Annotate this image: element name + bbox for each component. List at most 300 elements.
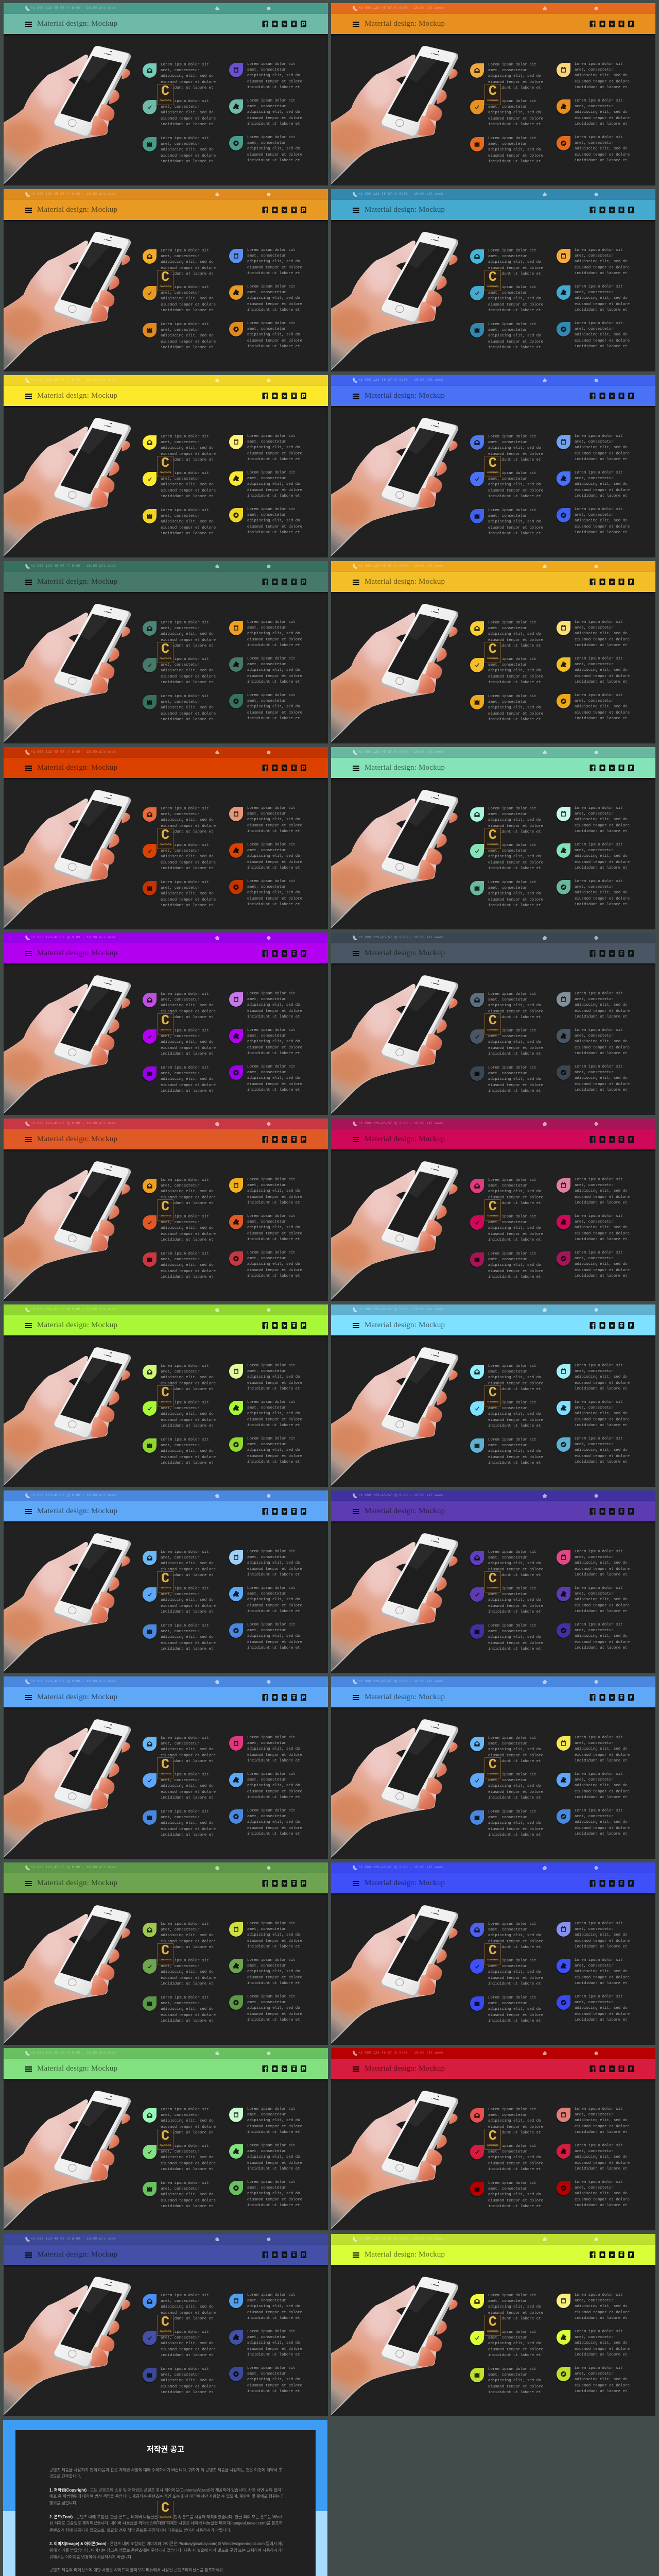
- watermark: [157, 828, 174, 849]
- feature: Lorem ipsum dolor sit amet, consectetur adipiscing elit, sed do eiusmod tempor et dolore incididunt ut labore et: [161, 2108, 216, 2135]
- feature: [229, 1623, 306, 1654]
- copyright: 행위를 금합니다.: [49, 2501, 78, 2505]
- watermark: [484, 1013, 501, 1035]
- watermark: CONTENTS: [160, 1028, 171, 1031]
- contact bar: [4, 1490, 328, 1501]
- feature: [229, 1065, 306, 1096]
- hand holding phone: [331, 1304, 655, 1487]
- watermark: [484, 2315, 501, 2336]
- feature: Lorem ipsum dolor sit amet, consectetur adipiscing elit, sed do eiusmod tempor et dolore incididunt ut labore et: [575, 806, 630, 834]
- watermark: CONTENTS: [160, 1214, 171, 1217]
- feature: Lorem ipsum dolor sit amet, consectetur adipiscing elit, sed do eiusmod tempor et dolore incididunt ut labore et: [247, 2144, 302, 2171]
- title bar: [331, 1873, 655, 1893]
- feature: Lorem ipsum dolor sit amet, consectetur adipiscing elit, sed do eiusmod tempor et dolore incididunt ut labore et: [161, 807, 216, 834]
- feature: Lorem ipsum dolor sit amet, consectetur adipiscing elit, sed do eiusmod tempor et dolore incididunt ut labore et: [247, 248, 302, 276]
- feature: Lorem ipsum dolor sit amet, consectetur adipiscing elit, sed do eiusmod tempor et dolore incididunt ut labore et: [575, 1178, 630, 1205]
- feature: [229, 2144, 306, 2175]
- feature: Lorem ipsum dolor sit amet, consectetur adipiscing elit, sed do eiusmod tempor et dolore incididunt ut labore et: [247, 843, 302, 870]
- contact bar: +1 000 123-45-67 ◷ 9:00 - 18:00 all week: [358, 378, 443, 382]
- watermark: [484, 456, 501, 477]
- watermark: CONTENTS: [487, 1958, 498, 1961]
- title bar: [4, 14, 328, 34]
- feature: Lorem ipsum dolor sit amet, consectetur adipiscing elit, sed do eiusmod tempor et dolore incididunt ut labore et: [247, 879, 302, 907]
- feature: Lorem ipsum dolor sit amet, consectetur adipiscing elit, sed do eiusmod tempor et dolore incididunt ut labore et: [575, 2366, 630, 2394]
- panel: teal mockup: [4, 3, 328, 185]
- contact bar: +1 000 123-45-67 ◷ 9:00 - 18:00 all week: [358, 192, 443, 196]
- watermark: C: [161, 1571, 169, 1587]
- feature: Lorem ipsum dolor sit amet, consectetur adipiscing elit, sed do eiusmod tempor et dolore incididunt ut labore et: [247, 1364, 302, 1391]
- feature: [229, 1736, 306, 1767]
- title bar: Material design: Mockup: [365, 20, 445, 28]
- panel: bright blue mockup: [331, 375, 655, 557]
- feature: Lorem ipsum dolor sit amet, consectetur adipiscing elit, sed do eiusmod tempor et dolore incididunt ut labore et: [575, 2293, 630, 2320]
- feature: [470, 881, 547, 912]
- contact bar: [331, 1490, 655, 1501]
- feature: Lorem ipsum dolor sit amet, consectetur adipiscing elit, sed do eiusmod tempor et dolore incididunt ut labore et: [247, 1251, 302, 1278]
- hand holding phone: [331, 232, 458, 370]
- watermark: C: [489, 1757, 497, 1773]
- panel: yellow mockup: [4, 375, 328, 557]
- panel: mint mockup: [331, 747, 655, 929]
- watermark: CONTENTS: [487, 1400, 498, 1403]
- feature: [229, 1959, 306, 1990]
- feature: [470, 1737, 547, 1768]
- feature: Lorem ipsum dolor sit amet, consectetur adipiscing elit, sed do eiusmod tempor et dolore incididunt ut labore et: [575, 1400, 630, 1428]
- feature: [470, 695, 547, 726]
- contact bar: [4, 189, 328, 200]
- feature: Lorem ipsum dolor sit amet, consectetur adipiscing elit, sed do eiusmod tempor et dolore incididunt ut labore et: [161, 1066, 216, 1093]
- title bar: Material design: Mockup: [365, 1507, 445, 1515]
- contact bar: +1 000 123-45-67 ◷ 9:00 - 18:00 all week: [31, 1866, 116, 1870]
- contact bar: [331, 747, 655, 758]
- feature: Lorem ipsum dolor sit amet, consectetur adipiscing elit, sed do eiusmod tempor et dolore incididunt ut labore et: [161, 2181, 216, 2209]
- feature: Lorem ipsum dolor sit amet, consectetur adipiscing elit, sed do eiusmod tempor et dolore incididunt ut labore et: [247, 99, 302, 126]
- feature: [143, 1252, 220, 1283]
- feature: [229, 1178, 306, 1209]
- feature: [470, 2368, 547, 2399]
- watermark: C: [161, 270, 169, 285]
- feature: Lorem ipsum dolor sit amet, consectetur adipiscing elit, sed do eiusmod tempor et dolore incididunt ut labore et: [161, 1996, 216, 2023]
- feature: Lorem ipsum dolor sit amet, consectetur adipiscing elit, sed do eiusmod tempor et dolore incididunt ut labore et: [488, 2330, 543, 2358]
- feature: Lorem ipsum dolor sit amet, consectetur adipiscing elit, sed do eiusmod tempor et dolore incididunt ut labore et: [247, 434, 302, 462]
- feature: Lorem ipsum dolor sit amet, consectetur adipiscing elit, sed do eiusmod tempor et dolore incididunt ut labore et: [575, 1437, 630, 1464]
- watermark: [484, 1385, 501, 1406]
- title bar: [4, 1315, 328, 1335]
- title bar: [331, 200, 655, 220]
- watermark: CONTENTS: [160, 1772, 171, 1775]
- feature: Lorem ipsum dolor sit amet, consectetur adipiscing elit, sed do eiusmod tempor et dolore incididunt ut labore et: [247, 1995, 302, 2022]
- contact bar: +1 000 123-45-67 ◷ 9:00 - 18:00 all week: [31, 1494, 116, 1498]
- contact bar: [331, 933, 655, 943]
- contact bar: [4, 3, 328, 14]
- feature: [143, 1365, 220, 1396]
- panel: yellow lime mockup: [331, 2234, 655, 2416]
- feature: [557, 843, 634, 874]
- feature: [143, 1066, 220, 1097]
- feature: Lorem ipsum dolor sit amet, consectetur adipiscing elit, sed do eiusmod tempor et dolore incididunt ut labore et: [575, 693, 630, 721]
- title bar: Material design: Mockup: [365, 578, 445, 586]
- feature: Lorem ipsum dolor sit amet, consectetur adipiscing elit, sed do eiusmod tempor et dolore incididunt ut labore et: [488, 843, 543, 871]
- feature: Lorem ipsum dolor sit amet, consectetur adipiscing elit, sed do eiusmod tempor et dolore incididunt ut labore et: [247, 2107, 302, 2134]
- watermark: CONTENTS: [487, 1586, 498, 1589]
- hand holding phone: [4, 1304, 328, 1487]
- watermark: [484, 642, 501, 663]
- closing line: 콘텐츠 제품의 라이선스에 대한 사항은 사이트의 불러오기 메뉴에서 사용된 콘텐츠라이선스를 참조하세요.: [49, 2568, 224, 2572]
- title bar: [4, 943, 328, 963]
- feature: [557, 1773, 634, 1804]
- contact bar: +1 000 123-45-67 ◷ 9:00 - 18:00 all week: [31, 564, 116, 568]
- feature: [229, 843, 306, 874]
- feature: [143, 1810, 220, 1841]
- feature: [557, 992, 634, 1023]
- feature: Lorem ipsum dolor sit amet, consectetur adipiscing elit, sed do eiusmod tempor et dolore incididunt ut labore et: [575, 657, 630, 684]
- feature: Lorem ipsum dolor sit amet, consectetur adipiscing elit, sed do eiusmod tempor et dolore incididunt ut labore et: [247, 62, 302, 90]
- feature: [470, 1959, 547, 1990]
- contact bar: [331, 1304, 655, 1315]
- feature: Lorem ipsum dolor sit amet, consectetur adipiscing elit, sed do eiusmod tempor et dolore incididunt ut labore et: [575, 1809, 630, 1836]
- feature: [557, 471, 634, 502]
- feature: Lorem ipsum dolor sit amet, consectetur adipiscing elit, sed do eiusmod tempor et dolore incididunt ut labore et: [575, 879, 630, 907]
- contact bar: +1 000 123-45-67 ◷ 9:00 - 18:00 all week: [31, 1680, 116, 1684]
- title bar: Material design: Mockup: [37, 20, 117, 28]
- contact bar: +1 000 123-45-67 ◷ 9:00 - 18:00 all week: [358, 750, 443, 754]
- feature: Lorem ipsum dolor sit amet, consectetur adipiscing elit, sed do eiusmod tempor et dolore incididunt ut labore et: [161, 285, 216, 313]
- contact bar: +1 000 123-45-67 ◷ 9:00 - 18:00 all week: [31, 1122, 116, 1126]
- feature: [470, 1551, 547, 1582]
- feature: Lorem ipsum dolor sit amet, consectetur adipiscing elit, sed do eiusmod tempor et dolore incididunt ut labore et: [488, 2144, 543, 2172]
- feature: [143, 807, 220, 838]
- feature: [557, 1736, 634, 1767]
- feature: Lorem ipsum dolor sit amet, consectetur adipiscing elit, sed do eiusmod tempor et dolore incididunt ut labore et: [575, 135, 630, 163]
- panel: deep orange mockup: [4, 1118, 328, 1301]
- feature: Lorem ipsum dolor sit amet, consectetur adipiscing elit, sed do eiusmod tempor et dolore incididunt ut labore et: [488, 99, 543, 127]
- contact bar: +1 000 123-45-67 ◷ 9:00 - 18:00 all week: [358, 2237, 443, 2241]
- contact bar: [4, 2234, 328, 2245]
- feature: [557, 807, 634, 838]
- feature: Lorem ipsum dolor sit amet, consectetur adipiscing elit, sed do eiusmod tempor et dolore incididunt ut labore et: [247, 135, 302, 163]
- feature: Lorem ipsum dolor sit amet, consectetur adipiscing elit, sed do eiusmod tempor et dolore incididunt ut labore et: [247, 806, 302, 834]
- feature: [143, 1996, 220, 2027]
- hand holding phone: [331, 561, 655, 743]
- feature: [229, 1215, 306, 1246]
- watermark: C: [161, 2315, 169, 2330]
- feature: Lorem ipsum dolor sit amet, consectetur adipiscing elit, sed do eiusmod tempor et dolore incididunt ut labore et: [488, 1401, 543, 1428]
- feature: Lorem ipsum dolor sit amet, consectetur adipiscing elit, sed do eiusmod tempor et dolore incididunt ut labore et: [247, 1550, 302, 1577]
- panel: lime mockup: [4, 1304, 328, 1487]
- contact bar: [4, 933, 328, 943]
- title bar: Material design: Mockup: [37, 1507, 117, 1515]
- feature: [143, 2368, 220, 2399]
- title bar: [4, 200, 328, 220]
- panel: orange mockup: [331, 3, 655, 185]
- feature: Lorem ipsum dolor sit amet, consectetur adipiscing elit, sed do eiusmod tempor et dolore incididunt ut labore et: [488, 2367, 543, 2395]
- feature: Lorem ipsum dolor sit amet, consectetur adipiscing elit, sed do eiusmod tempor et dolore incididunt ut labore et: [575, 843, 630, 870]
- title bar: [4, 1501, 328, 1521]
- watermark: [484, 828, 501, 849]
- watermark: CONTENTS: [160, 2144, 171, 2146]
- watermark: [484, 1199, 501, 1221]
- contact bar: +1 000 123-45-67 ◷ 9:00 - 18:00 all week: [31, 6, 116, 10]
- feature: [229, 2181, 306, 2212]
- watermark: [484, 2129, 501, 2150]
- feature: Lorem ipsum dolor sit amet, consectetur adipiscing elit, sed do eiusmod tempor et dolore incididunt ut labore et: [161, 1178, 216, 1206]
- contact bar: [331, 3, 655, 14]
- feature: [557, 1587, 634, 1618]
- feature: Lorem ipsum dolor sit amet, consectetur adipiscing elit, sed do eiusmod tempor et dolore incididunt ut labore et: [161, 63, 216, 90]
- feature: Lorem ipsum dolor sit amet, consectetur adipiscing elit, sed do eiusmod tempor et dolore incididunt ut labore et: [575, 471, 630, 498]
- contact bar: +1 000 123-45-67 ◷ 9:00 - 18:00 all week: [358, 1680, 443, 1684]
- feature: [229, 1029, 306, 1060]
- feature: Lorem ipsum dolor sit amet, consectetur adipiscing elit, sed do eiusmod tempor et dolore incididunt ut labore et: [161, 471, 216, 499]
- feature: Lorem ipsum dolor sit amet, consectetur adipiscing elit, sed do eiusmod tempor et dolore incididunt ut labore et: [247, 1400, 302, 1428]
- feature: Lorem ipsum dolor sit amet, consectetur adipiscing elit, sed do eiusmod tempor et dolore incididunt ut labore et: [161, 1029, 216, 1056]
- watermark: CONTENTS: [487, 843, 498, 845]
- feature: Lorem ipsum dolor sit amet, consectetur adipiscing elit, sed do eiusmod tempor et dolore incididunt ut labore et: [247, 1623, 302, 1650]
- title bar: [331, 943, 655, 963]
- contact bar: [4, 1862, 328, 1873]
- watermark: [157, 2129, 174, 2150]
- feature: Lorem ipsum dolor sit amet, consectetur adipiscing elit, sed do eiusmod tempor et dolore incididunt ut labore et: [575, 507, 630, 535]
- feature: [143, 1587, 220, 1618]
- feature: Lorem ipsum dolor sit amet, consectetur adipiscing elit, sed do eiusmod tempor et dolore incididunt ut labore et: [161, 137, 216, 164]
- feature: [229, 694, 306, 725]
- watermark: C: [161, 1013, 169, 1029]
- feature: [229, 1550, 306, 1581]
- feature: Lorem ipsum dolor sit amet, consectetur adipiscing elit, sed do eiusmod tempor et dolore incididunt ut labore et: [247, 507, 302, 535]
- feature: [557, 621, 634, 652]
- watermark: CONTENTS: [160, 471, 171, 473]
- feature: Lorem ipsum dolor sit amet, consectetur adipiscing elit, sed do eiusmod tempor et dolore incididunt ut labore et: [488, 1736, 543, 1764]
- hand holding phone: [4, 1862, 328, 2045]
- title bar: [331, 386, 655, 406]
- hand holding phone: [4, 232, 131, 370]
- watermark: C: [489, 2129, 497, 2144]
- feature: Lorem ipsum dolor sit amet, consectetur adipiscing elit, sed do eiusmod tempor et dolore incididunt ut labore et: [161, 2367, 216, 2395]
- feature: Lorem ipsum dolor sit amet, consectetur adipiscing elit, sed do eiusmod tempor et dolore incididunt ut labore et: [161, 1401, 216, 1428]
- feature: [470, 1029, 547, 1060]
- panel: vivid indigo mockup: [331, 1862, 655, 2045]
- feature: [470, 1996, 547, 2027]
- panel: light blue mockup: [4, 1490, 328, 1673]
- feature: Lorem ipsum dolor sit amet, consectetur adipiscing elit, sed do eiusmod tempor et dolore incididunt ut labore et: [575, 1958, 630, 1986]
- watermark: CONTENTS: [487, 285, 498, 287]
- feature: Lorem ipsum dolor sit amet, consectetur adipiscing elit, sed do eiusmod tempor et dolore incididunt ut labore et: [488, 992, 543, 1020]
- watermark: CONTENTS: [487, 1214, 498, 1217]
- contact bar: +1 000 123-45-67 ◷ 9:00 - 18:00 all week: [31, 936, 116, 940]
- hand holding phone: [4, 933, 328, 1115]
- feature: Lorem ipsum dolor sit amet, consectetur adipiscing elit, sed do eiusmod tempor et dolore incididunt ut labore et: [488, 1066, 543, 1093]
- contact bar: [331, 1862, 655, 1873]
- feature: [557, 1215, 634, 1246]
- contact bar: +1 000 123-45-67 ◷ 9:00 - 18:00 all week: [31, 1308, 116, 1312]
- contact bar: [331, 2234, 655, 2245]
- feature: [557, 1995, 634, 2026]
- feature: Lorem ipsum dolor sit amet, consectetur adipiscing elit, sed do eiusmod tempor et dolore incididunt ut labore et: [161, 1810, 216, 1837]
- title bar: [331, 14, 655, 34]
- feature: Lorem ipsum dolor sit amet, consectetur adipiscing elit, sed do eiusmod tempor et dolore incididunt ut labore et: [247, 2366, 302, 2394]
- contact bar: +1 000 123-45-67 ◷ 9:00 - 18:00 all week: [31, 2051, 116, 2055]
- feature: [557, 508, 634, 539]
- images: 위해서는 이미지를 변경하여 사용하시기 바랍니다.: [49, 2555, 132, 2560]
- feature: Lorem ipsum dolor sit amet, consectetur adipiscing elit, sed do eiusmod tempor et dolore incididunt ut labore et: [575, 1364, 630, 1391]
- hand holding phone: [331, 2048, 655, 2230]
- feature: Lorem ipsum dolor sit amet, consectetur adipiscing elit, sed do eiusmod tempor et dolore incididunt ut labore et: [575, 1586, 630, 1614]
- feature: Lorem ipsum dolor sit amet, consectetur adipiscing elit, sed do eiusmod tempor et dolore incididunt ut labore et: [488, 1178, 543, 1206]
- hand holding phone: [4, 2234, 328, 2416]
- feature: [229, 2367, 306, 2398]
- feature: [143, 2294, 220, 2325]
- watermark: [157, 1013, 174, 1035]
- panel: dark green mockup: [4, 561, 328, 743]
- feature: Lorem ipsum dolor sit amet, consectetur adipiscing elit, sed do eiusmod tempor et dolore incididunt ut labore et: [575, 1550, 630, 1577]
- watermark: [484, 84, 501, 105]
- watermark: C: [489, 1013, 497, 1029]
- title bar: [331, 2059, 655, 2079]
- feature: Lorem ipsum dolor sit amet, consectetur adipiscing elit, sed do eiusmod tempor et dolore incididunt ut labore et: [575, 2180, 630, 2208]
- feature: [557, 1029, 634, 1060]
- feature: Lorem ipsum dolor sit amet, consectetur adipiscing elit, sed do eiusmod tempor et dolore incididunt ut labore et: [247, 1736, 302, 1763]
- title bar: [4, 758, 328, 778]
- watermark: [157, 2501, 174, 2522]
- watermark: C: [489, 1385, 497, 1401]
- watermark: C: [161, 1199, 169, 1215]
- feature: Lorem ipsum dolor sit amet, consectetur adipiscing elit, sed do eiusmod tempor et dolore incididunt ut labore et: [161, 657, 216, 685]
- title bar: [4, 1687, 328, 1707]
- contact bar: [4, 375, 328, 386]
- title bar: Material design: Mockup: [37, 1693, 117, 1701]
- title bar: Material design: Mockup: [365, 1321, 445, 1329]
- panel: amber mockup: [4, 189, 328, 371]
- feature: [229, 1437, 306, 1468]
- feature: [557, 2367, 634, 2398]
- title bar: Material design: Mockup: [365, 2250, 445, 2259]
- feature: Lorem ipsum dolor sit amet, consectetur adipiscing elit, sed do eiusmod tempor et dolore incididunt ut labore et: [247, 1809, 302, 1836]
- feature: Lorem ipsum dolor sit amet, consectetur adipiscing elit, sed do eiusmod tempor et dolore incididunt ut labore et: [488, 1959, 543, 1986]
- contact bar: [331, 561, 655, 572]
- feature: [143, 1773, 220, 1804]
- title bar: [331, 1315, 655, 1335]
- panel: golden mockup: [331, 561, 655, 743]
- title bar: Material design: Mockup: [37, 2250, 117, 2259]
- feature: [143, 881, 220, 912]
- feature: Lorem ipsum dolor sit amet, consectetur adipiscing elit, sed do eiusmod tempor et dolore incididunt ut labore et: [488, 1252, 543, 1279]
- feature: [470, 1438, 547, 1469]
- feature: Lorem ipsum dolor sit amet, consectetur adipiscing elit, sed do eiusmod tempor et dolore incididunt ut labore et: [247, 1214, 302, 1242]
- title bar: Material design: Mockup: [37, 1879, 117, 1887]
- feature: Lorem ipsum dolor sit amet, consectetur adipiscing elit, sed do eiusmod tempor et dolore incididunt ut labore et: [247, 1065, 302, 1092]
- feature: Lorem ipsum dolor sit amet, consectetur adipiscing elit, sed do eiusmod tempor et dolore incididunt ut labore et: [575, 248, 630, 276]
- title bar: Material design: Mockup: [365, 1879, 445, 1887]
- contact bar: +1 000 123-45-67 ◷ 9:00 - 18:00 all week: [358, 2051, 443, 2055]
- title bar: [4, 2245, 328, 2265]
- watermark: C: [161, 828, 169, 843]
- feature: Lorem ipsum dolor sit amet, consectetur adipiscing elit, sed do eiusmod tempor et dolore incididunt ut labore et: [488, 509, 543, 536]
- watermark: [484, 1757, 501, 1778]
- hand holding phone: [4, 1676, 328, 1859]
- watermark: C: [161, 1943, 169, 1959]
- watermark: C: [489, 642, 497, 657]
- feature: [229, 621, 306, 652]
- watermark: CONTENTS: [487, 2330, 498, 2332]
- contact bar: +1 000 123-45-67 ◷ 9:00 - 18:00 all week: [31, 192, 116, 196]
- title bar: [4, 572, 328, 592]
- feature: Lorem ipsum dolor sit amet, consectetur adipiscing elit, sed do eiusmod tempor et dolore incididunt ut labore et: [161, 323, 216, 350]
- feature: [557, 1550, 634, 1581]
- watermark: CONTENTS: [160, 843, 171, 845]
- watermark: [157, 2315, 174, 2336]
- hand holding phone: [4, 2048, 328, 2230]
- feature: [229, 992, 306, 1023]
- feature: [470, 2331, 547, 2362]
- contact bar: +1 000 123-45-67 ◷ 9:00 - 18:00 all week: [358, 1494, 443, 1498]
- panel: navy indigo mockup: [4, 2234, 328, 2416]
- contact bar: +1 000 123-45-67 ◷ 9:00 - 18:00 all week: [358, 936, 443, 940]
- feature: Lorem ipsum dolor sit amet, consectetur adipiscing elit, sed do eiusmod tempor et dolore incididunt ut labore et: [575, 1028, 630, 1056]
- feature: [143, 1959, 220, 1990]
- feature: [229, 1773, 306, 1804]
- contact bar: [331, 1118, 655, 1129]
- watermark: CONTENTS: [160, 1958, 171, 1961]
- watermark: C: [161, 2501, 169, 2516]
- feature: [143, 658, 220, 689]
- feature: [557, 880, 634, 911]
- watermark: C: [161, 2129, 169, 2144]
- watermark: CONTENTS: [160, 285, 171, 287]
- feature: [229, 1995, 306, 2026]
- contact bar: +1 000 123-45-67 ◷ 9:00 - 18:00 all week: [358, 564, 443, 568]
- title bar: Material design: Mockup: [37, 2064, 117, 2073]
- contact bar: [331, 2048, 655, 2059]
- feature: Lorem ipsum dolor sit amet, consectetur adipiscing elit, sed do eiusmod tempor et dolore incididunt ut labore et: [575, 1214, 630, 1242]
- watermark: CONTENTS: [487, 99, 498, 101]
- watermark: [157, 84, 174, 105]
- feature: [557, 1178, 634, 1209]
- feature: Lorem ipsum dolor sit amet, consectetur adipiscing elit, sed do eiusmod tempor et dolore incididunt ut labore et: [488, 1922, 543, 1950]
- feature: [229, 2330, 306, 2361]
- title bar: [331, 758, 655, 778]
- watermark: [157, 270, 174, 291]
- contact bar: +1 000 123-45-67 ◷ 9:00 - 18:00 all week: [358, 1866, 443, 1870]
- feature: [229, 807, 306, 838]
- intro text: 것으로 간주합니다.: [49, 2474, 81, 2479]
- feature: Lorem ipsum dolor sit amet, consectetur adipiscing elit, sed do eiusmod tempor et dolore incididunt ut labore et: [488, 435, 543, 462]
- feature: [229, 1809, 306, 1840]
- feature: Lorem ipsum dolor sit amet, consectetur adipiscing elit, sed do eiusmod tempor et dolore incididunt ut labore et: [488, 2108, 543, 2135]
- feature: [143, 1179, 220, 1210]
- hand holding phone: [4, 1118, 328, 1301]
- watermark: C: [489, 828, 497, 843]
- fonts: 콘텐츠와 함께 제공되지 않으므로, 필요할 경우 해당 폰트를 구입하거나 다운로드 받아서 사용하시기 바랍니다.: [49, 2528, 231, 2533]
- title bar: Material design: Mockup: [37, 206, 117, 214]
- feature: Lorem ipsum dolor sit amet, consectetur adipiscing elit, sed do eiusmod tempor et dolore incididunt ut labore et: [488, 1029, 543, 1056]
- watermark: C: [489, 1199, 497, 1215]
- feature: Lorem ipsum dolor sit amet, consectetur adipiscing elit, sed do eiusmod tempor et dolore incididunt ut labore et: [247, 285, 302, 312]
- contact bar: [331, 375, 655, 386]
- panel: crimson mockup: [331, 1118, 655, 1301]
- watermark: C: [161, 84, 169, 99]
- feature: [143, 1215, 220, 1246]
- feature: Lorem ipsum dolor sit amet, consectetur adipiscing elit, sed do eiusmod tempor et dolore incididunt ut labore et: [488, 1624, 543, 1651]
- contact bar: +1 000 123-45-67 ◷ 9:00 - 18:00 all week: [31, 378, 116, 382]
- feature: [557, 694, 634, 725]
- feature: [229, 1364, 306, 1395]
- feature: Lorem ipsum dolor sit amet, consectetur adipiscing elit, sed do eiusmod tempor et dolore incididunt ut labore et: [247, 1586, 302, 1614]
- feature: Lorem ipsum dolor sit amet, consectetur adipiscing elit, sed do eiusmod tempor et dolore incididunt ut labore et: [247, 657, 302, 684]
- feature: [470, 993, 547, 1024]
- feature: [470, 1179, 547, 1210]
- hand holding phone: [331, 46, 458, 184]
- feature: Lorem ipsum dolor sit amet, consectetur adipiscing elit, sed do eiusmod tempor et dolore incididunt ut labore et: [247, 1437, 302, 1464]
